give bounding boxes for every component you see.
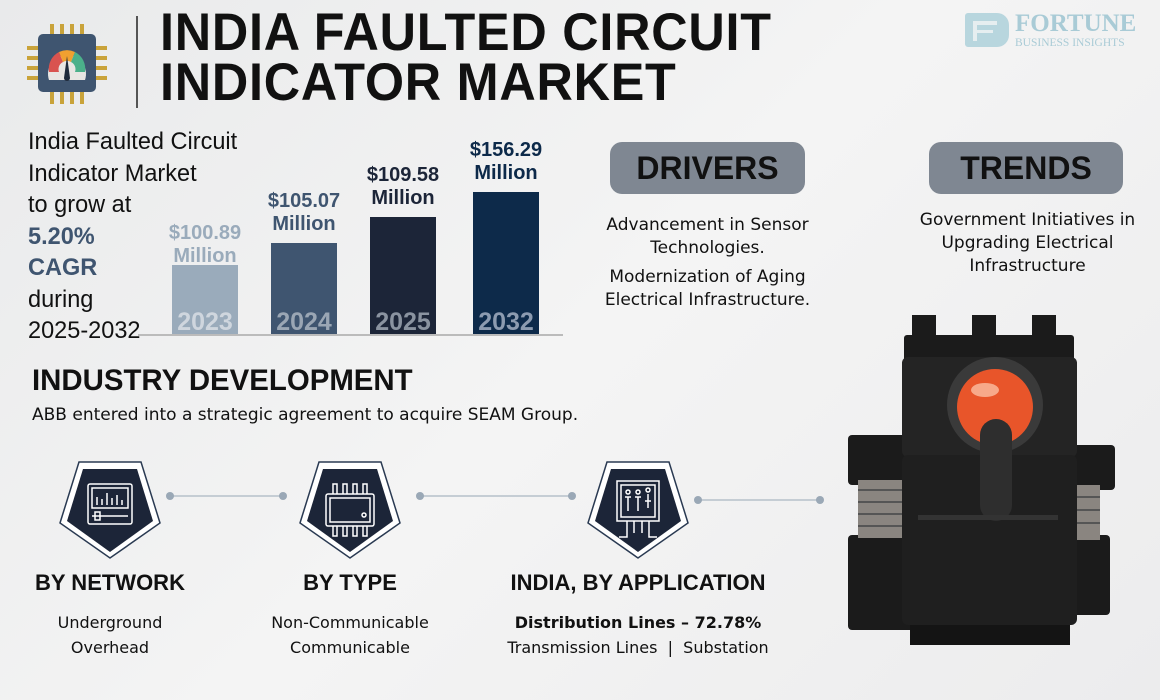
bar 2032: [473, 192, 539, 334]
section: by application: Distribution Lines – 72.78%: [515, 613, 761, 632]
bar chart: [138, 139, 563, 336]
section: by type: BY TYPE: [303, 570, 397, 595]
section: by network: BY NETWORK: [35, 570, 185, 595]
text: CAGR statement: during: [28, 286, 93, 312]
bar chart: $156.29: [470, 139, 542, 161]
trends: Government Initiatives in: [920, 210, 1135, 230]
icon: network pentagon: [59, 461, 161, 559]
bar chart: Million: [173, 245, 237, 267]
image: faulted circuit indicator device: [848, 315, 1115, 645]
heading: industry development: INDUSTRY DEVELOPMENT: [32, 364, 413, 397]
section: by network: Underground: [58, 613, 162, 632]
bar chart: Million: [371, 187, 435, 209]
trends: TRENDS: [960, 150, 1092, 186]
icon: chip gauge: [27, 24, 107, 104]
drivers: [605, 142, 810, 310]
section: by application: [507, 570, 769, 657]
bar chart: $100.89: [169, 222, 241, 244]
logo: BUSINESS INSIGHTS: [1015, 37, 1125, 49]
bar 2025: [370, 217, 436, 334]
title: INDICATOR MARKET: [160, 53, 677, 112]
drivers: Technologies.: [650, 238, 765, 258]
connectors: [166, 492, 824, 504]
text: CAGR statement: to grow at: [28, 191, 131, 218]
bar chart: 2024: [276, 308, 332, 336]
section: by type: [271, 570, 429, 657]
text: industry development: ABB entered into a strategic agreement to acquire SEAM Group.: [32, 405, 578, 425]
bar chart: 2025: [375, 308, 431, 336]
bar chart: Million: [474, 162, 538, 184]
logo: FORTUNE: [1015, 10, 1136, 37]
section: by type: Communicable: [290, 638, 410, 657]
bar chart: Million: [272, 213, 336, 235]
text: CAGR statement: India Faulted Circuit: [28, 128, 237, 155]
title: [160, 3, 772, 112]
drivers: Electrical Infrastructure.: [605, 290, 810, 310]
bar chart: 2032: [478, 308, 534, 336]
bar 2024: [271, 243, 337, 334]
text: CAGR statement: 2025-2032: [28, 317, 140, 344]
trends: [920, 142, 1135, 276]
trends: Infrastructure: [969, 256, 1086, 276]
section: by application: INDIA, BY APPLICATION: [510, 570, 766, 595]
icon: application pentagon: [587, 461, 689, 559]
drivers: Advancement in Sensor: [606, 215, 809, 235]
trends: Upgrading Electrical: [941, 233, 1114, 253]
text: CAGR statement: [28, 128, 237, 344]
text: CAGR statement: 5.20%: [28, 222, 95, 250]
drivers: DRIVERS: [636, 150, 779, 186]
bar chart: $109.58: [367, 164, 439, 186]
drivers: Modernization of Aging: [609, 267, 806, 287]
text: CAGR statement: Indicator Market: [28, 160, 197, 186]
bar chart: 2023: [177, 308, 233, 336]
bar 2023: [172, 265, 238, 334]
section: by network: Overhead: [71, 638, 149, 657]
title: INDIA FAULTED CIRCUIT: [160, 3, 772, 62]
logo: [965, 10, 1136, 49]
bar chart: $105.07: [268, 190, 340, 212]
text: CAGR statement: CAGR: [28, 254, 97, 281]
section: by type: Non-Communicable: [271, 613, 429, 632]
icon: type pentagon: [299, 461, 401, 559]
section: by application: Transmission Lines | Substation: [507, 638, 769, 657]
section: by network: [35, 570, 185, 657]
